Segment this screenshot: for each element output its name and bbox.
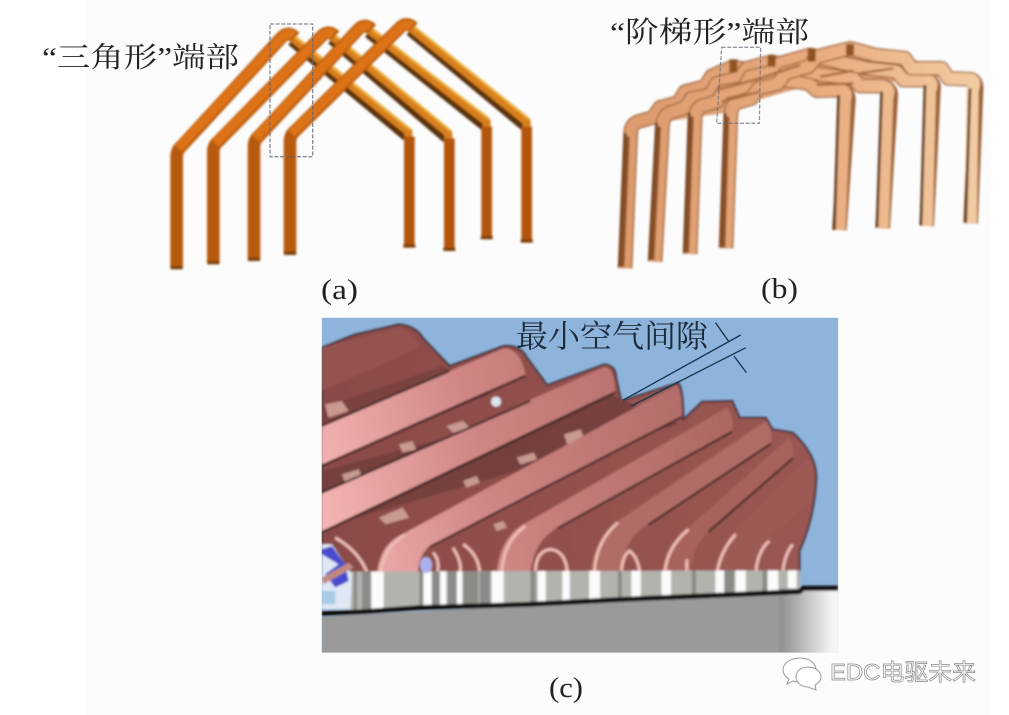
- ground: [322, 588, 840, 654]
- curved highlights: [335, 523, 793, 573]
- caption c: (c): [549, 673, 583, 704]
- wire 1: [625, 67, 848, 268]
- stator tooth band: [349, 569, 803, 614]
- right descending strands: [288, 25, 528, 250]
- stepped band backing: [640, 44, 947, 125]
- heading: triangular end: “三角形”端部: [42, 42, 239, 74]
- caption b: (b): [761, 274, 798, 305]
- dark separators: [322, 371, 793, 547]
- heading: stepped end: “阶梯形”端部: [610, 16, 809, 49]
- left rising strands: [177, 24, 413, 268]
- label: minimum air gap: 最小空气间隙: [516, 319, 710, 354]
- dimension lines: [623, 323, 746, 406]
- winding body: [322, 324, 816, 574]
- caption a: (a): [321, 275, 358, 306]
- wire feet: [171, 238, 533, 268]
- dashed box b: [717, 47, 761, 123]
- icon: chat bubbles: [783, 658, 821, 690]
- panel b: stepped end hairpins: [620, 44, 976, 268]
- watermark text: EDC电驱未来: [830, 659, 976, 685]
- hole: [491, 397, 501, 407]
- slot highlights: [325, 401, 584, 531]
- leg shadows: [620, 85, 970, 267]
- wire 4: [726, 48, 976, 248]
- back slots: [322, 366, 488, 424]
- bands: [322, 333, 383, 392]
- dashed box a: [270, 24, 313, 157]
- blue rotor detail: [322, 544, 352, 609]
- panel c: stator winding photo: [322, 318, 840, 654]
- wire 3: [690, 55, 934, 254]
- panel a: triangular end hairpins: [171, 24, 533, 268]
- watermark: [783, 658, 976, 690]
- apex notches: [733, 44, 850, 73]
- crossing shadows: [717, 65, 893, 102]
- sky background: [322, 318, 838, 653]
- wire 2: [655, 62, 891, 262]
